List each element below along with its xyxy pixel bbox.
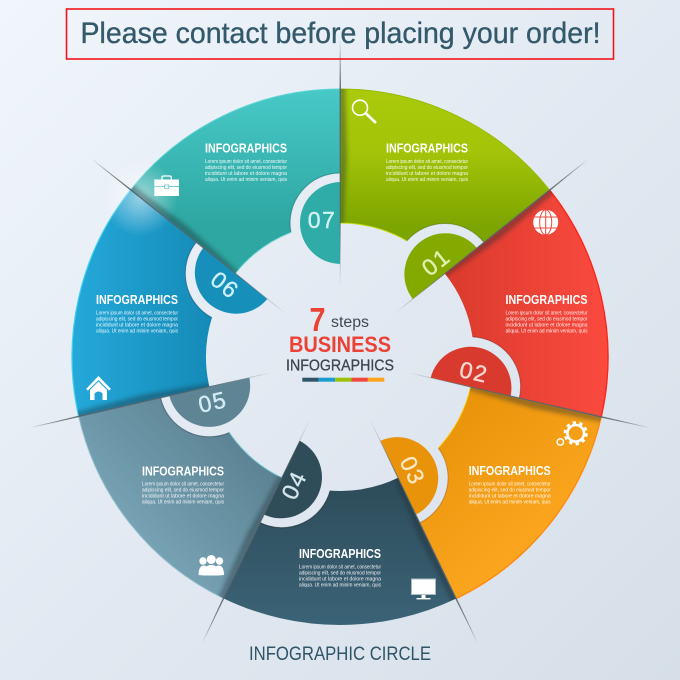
- text block: step 05: INFOGRAPHICS: [142, 463, 224, 478]
- panel: step 03 orange: [350, 370, 601, 621]
- text block: step 06: Lorem ipsum dolor sit amet, consectetur: [96, 310, 178, 316]
- text block: step 01: INFOGRAPHICS: [386, 141, 468, 156]
- text block: step 04: incididunt ut labore et dolore magna: [299, 576, 381, 582]
- text block: step 07: aliqua. Ut enim ad minim veniam, quis: [205, 177, 287, 183]
- text block: step 05: [142, 463, 224, 506]
- icon: globe: [533, 210, 558, 235]
- bottom caption: INFOGRAPHIC CIRCLE: [249, 643, 431, 665]
- text block: step 03: [469, 463, 551, 505]
- icon: magnifier: [352, 100, 376, 123]
- text block: step 05: Lorem ipsum dolor sit amet, consectetur: [142, 482, 224, 488]
- text block: step 02: [506, 292, 588, 334]
- text block: step 06: aliqua. Ut enim ad minim veniam, quis: [96, 328, 178, 334]
- number 04: 04: [276, 466, 312, 504]
- panel: step 01 green: [340, 89, 550, 299]
- highlight glow on the blue and teal edge: [102, 160, 178, 236]
- number 03: 03: [395, 452, 431, 489]
- text block: step 04: Lorem ipsum dolor sit amet, consectetur: [299, 564, 381, 570]
- text block: step 04: adipiscing elit, sed do eiusmod tempor: [299, 570, 381, 576]
- sector: blue: [32, 166, 283, 417]
- sector: green: [340, 89, 550, 299]
- text block: step 07: [205, 141, 287, 183]
- text block: step 01: [386, 141, 468, 183]
- word: steps: steps: [331, 314, 369, 331]
- text block: step 05: adipiscing elit, sed do eiusmod tempor: [142, 488, 224, 494]
- text block: step 03: INFOGRAPHICS: [469, 463, 551, 478]
- number 05: 05: [196, 386, 230, 418]
- text block: step 01: adipiscing elit, sed do eiusmod tempor: [386, 165, 468, 171]
- icon: monitor: [412, 579, 436, 599]
- text block: step 07: Lorem ipsum dolor sit amet, consectetur: [205, 159, 287, 165]
- text block: step 02: Lorem ipsum dolor sit amet, consectetur: [506, 310, 588, 316]
- colour bar: [302, 378, 384, 382]
- panel: step 06 blue: [32, 166, 283, 417]
- text block: step 07: incididunt ut labore et dolore magna: [205, 171, 287, 177]
- number 01: 01: [417, 243, 455, 281]
- text block: step 02: aliqua. Ut enim ad minim veniam, quis: [506, 328, 588, 334]
- sector: red: [385, 190, 680, 485]
- number 02: 02: [457, 356, 491, 388]
- text block: step 07: INFOGRAPHICS: [205, 141, 287, 156]
- text block: step 03: aliqua. Ut enim ad minim veniam, quis: [469, 499, 551, 505]
- text block: step 01: Lorem ipsum dolor sit amet, consectetur: [386, 159, 468, 165]
- number 06: 06: [206, 266, 244, 304]
- text block: step 02: adipiscing elit, sed do eiusmod tempor: [506, 316, 588, 322]
- sector: teal: [130, 26, 425, 321]
- text block: step 06: [96, 292, 178, 334]
- text block: step 06: incididunt ut labore et dolore magna: [96, 322, 178, 328]
- word: BUSINESS: BUSINESS: [289, 332, 391, 357]
- text block: step 05: aliqua. Ut enim ad minim veniam, quis: [142, 500, 224, 506]
- icon: briefcase: [154, 176, 179, 196]
- icon: people: [198, 555, 224, 576]
- title text: Please contact before placing your order!: [80, 17, 600, 50]
- sector: grey blue: [35, 318, 315, 598]
- center heading: [286, 301, 394, 382]
- icon: gear: [557, 423, 586, 445]
- text block: step 04: [299, 546, 381, 588]
- text block: step 03: adipiscing elit, sed do eiusmod tempor: [469, 487, 551, 493]
- sector: dark slate: [176, 409, 456, 680]
- text block: step 02: INFOGRAPHICS: [506, 292, 588, 307]
- text block: step 04: aliqua. Ut enim ad minim veniam, quis: [299, 582, 381, 588]
- panel: step 05 grey blue: [35, 318, 315, 598]
- text block: step 03: Lorem ipsum dolor sit amet, consectetur: [469, 481, 551, 487]
- number 07: 07: [308, 207, 336, 233]
- title box: [66, 9, 614, 59]
- text block: step 07: adipiscing elit, sed do eiusmod tempor: [205, 165, 287, 171]
- text block: step 06: INFOGRAPHICS: [96, 292, 178, 307]
- text block: step 04: INFOGRAPHICS: [299, 546, 381, 561]
- panel: step 02 red: [385, 190, 680, 485]
- panel: step 07 teal: [130, 26, 425, 321]
- icon: house: [86, 376, 111, 400]
- word: INFOGRAPHICS: INFOGRAPHICS: [286, 358, 394, 375]
- text block: step 01: aliqua. Ut enim ad minim veniam, quis: [386, 177, 468, 183]
- text block: step 02: incididunt ut labore et dolore magna: [506, 322, 588, 328]
- panel: step 04 dark slate: [176, 409, 456, 680]
- text block: step 05: incididunt ut labore et dolore magna: [142, 494, 224, 500]
- text block: step 06: adipiscing elit, sed do eiusmod tempor: [96, 316, 178, 322]
- text block: step 03: incididunt ut labore et dolore magna: [469, 493, 551, 499]
- big 7: 7: [310, 301, 326, 338]
- text block: step 01: incididunt ut labore et dolore magna: [386, 171, 468, 177]
- sector: orange: [350, 370, 601, 621]
